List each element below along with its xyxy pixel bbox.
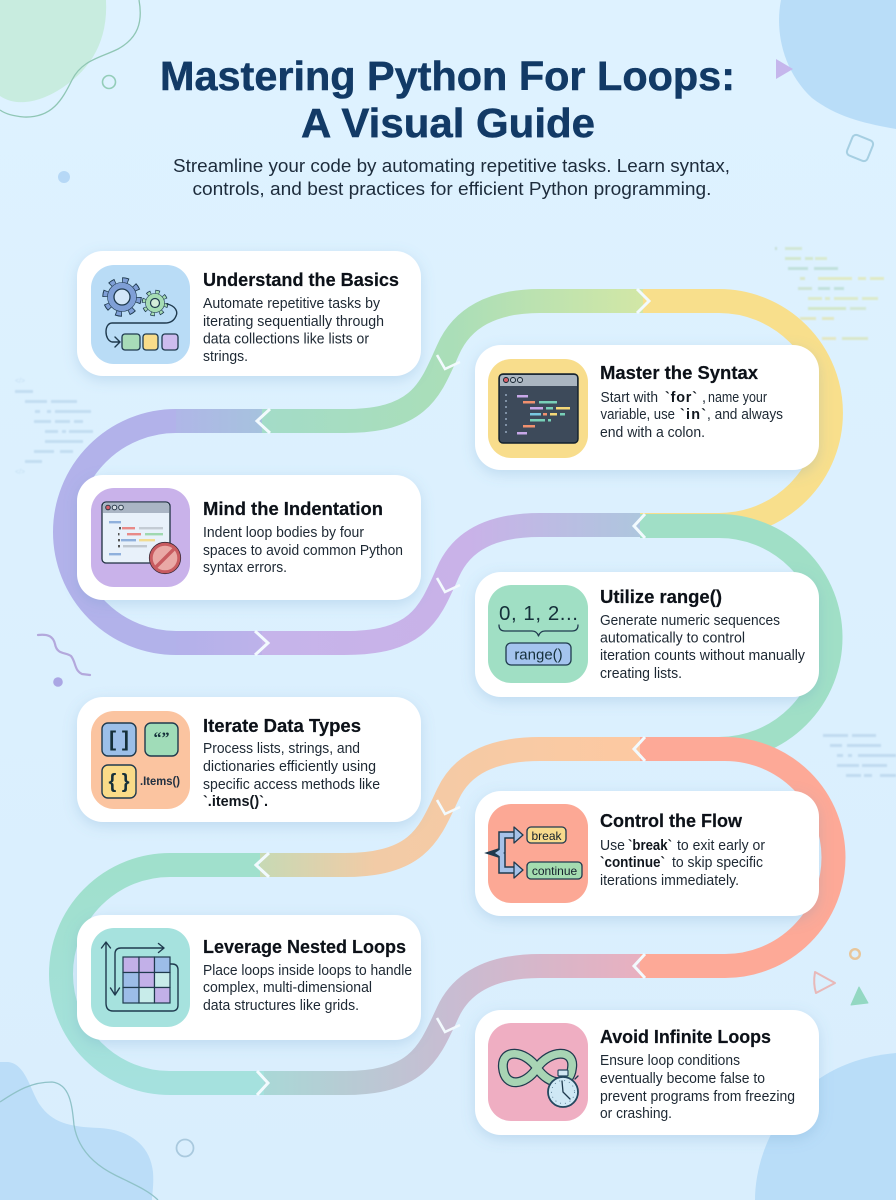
card body text: Generate numeric sequences [600,613,780,629]
card heading: Leverage Nested Loops [203,936,406,957]
card background [475,791,819,916]
decorative code lines: left [15,378,93,476]
decorative code lines: left: </> [15,469,25,476]
panel: Understand the Basics [77,251,421,376]
card body text: specific access methods like [203,777,380,793]
card body text: variable, use [600,407,675,423]
flow path: continuous loop of coloured bands [61,289,834,1095]
decorative ring: bottom [176,1140,194,1156]
decorative code lines: top right [775,247,884,340]
panel: Leverage Nested Loops [77,915,421,1040]
band: green S-curve [262,301,643,421]
card body text [600,838,765,889]
band: mauve S-curve [264,966,640,1083]
decorative blob: top right [779,0,896,129]
icon: data type symbols: .Items() [140,776,180,788]
card heading: Mind the Indentation [203,498,383,519]
card background [77,697,421,822]
decorative squiggle: left [38,635,90,675]
card body text: `break` [628,838,672,854]
icon: infinity loop with stopwatch [488,1023,588,1121]
card body text: to skip specific [672,855,763,871]
card body text: Place loops inside loops to handle [203,963,412,979]
subtitle: controls, and best practices for efficient Python programming. [192,178,712,199]
card background [475,345,819,470]
card body text: `for` [665,390,697,406]
card body text: data collections like lists or [203,332,369,348]
card heading: Utilize range() [600,586,722,607]
card body text: name your [708,390,767,406]
card body text: , [702,390,706,406]
card body text: strings. [203,349,248,365]
panel: Control the Flow [475,791,819,916]
band: salmon arc [640,749,834,966]
card body text [203,741,380,810]
band: purple lower straight [176,631,262,655]
decorative triangle: teal [851,987,868,1005]
card body text: spaces to avoid common Python [203,543,403,559]
decorative curve: top left [0,0,140,117]
card body text: `continue` [600,855,665,871]
chevron markers on the path [255,289,649,1095]
card body text: Automate repetitive tasks by [203,296,381,312]
card body text: `in` [680,407,706,423]
card body text: `.items()`. [203,794,268,810]
icon: gears and sequence [91,265,190,364]
title: Mastering Python For Loops: [160,53,735,99]
icon: data type symbols: “” [154,730,170,747]
card background [475,572,819,697]
icon: number sequence from range: range() [514,646,563,664]
card body text: creating lists. [600,666,682,682]
decorative blob: bottom right [755,1053,896,1200]
card body text: eventually become false to [600,1071,765,1087]
card body text: Ensure loop conditions [600,1053,740,1069]
icon: data type symbols: { } [108,771,130,793]
card body text: iterations immediately. [600,873,739,889]
title: A Visual Guide [301,100,595,146]
card body text: end with a colon. [600,425,705,441]
card body text: Use [600,838,625,854]
icon: branching arrows: break [531,829,563,843]
band: yellow arc [640,301,831,525]
subtitle: Streamline your code by automating repetitive tasks. Learn syntax, [173,155,730,176]
icon: code editor [488,359,588,458]
decorative triangle outline: pink [814,972,835,993]
decorative code lines: left: </> [15,378,25,385]
card background [475,1010,819,1135]
card body text: dictionaries efficiently using [203,759,376,775]
icon: indented code with stop sign [91,488,190,587]
card body text: to exit early or [677,838,765,854]
card body text: automatically to control [600,630,745,646]
card body text: Start with [600,390,658,406]
decorative rounded square: top right [846,134,874,162]
title [160,53,735,146]
panel: Avoid Infinite Loops [475,1010,819,1135]
card body text: Process lists, strings, and [203,741,360,757]
card body text [203,296,384,365]
band: purple upper curve [176,409,262,433]
card heading: Avoid Infinite Loops [600,1026,771,1047]
card heading: Understand the Basics [203,269,399,290]
card body text [600,613,806,682]
card body text: or crashing. [600,1106,672,1122]
decorative code lines: right [823,734,896,777]
decorative blob: top left [0,0,106,102]
card background [77,915,421,1040]
card body text: data structures like grids. [203,998,359,1014]
decorative ring: top left [102,76,116,88]
card heading: Control the Flow [600,810,743,831]
card body text [600,390,783,441]
card background [77,475,421,600]
band: purple S-curve [262,525,640,643]
decorative triangle: top right [776,59,793,79]
card body text: Indent loop bodies by four [203,525,364,541]
subtitle [173,155,730,199]
card heading: Iterate Data Types [203,715,361,736]
band: purple arc [65,421,176,643]
decorative ring: orange [850,949,860,959]
card body text: , and always [707,407,783,423]
decorative dot: left [58,171,70,183]
card body text: complex, multi-dimensional [203,980,372,996]
icon: data type symbols [91,711,190,809]
band: teal arc [61,865,264,1083]
panel: Mind the Indentation [77,475,421,600]
card heading: Master the Syntax [600,362,759,383]
decorative curve: bottom left [0,1082,158,1200]
panel: Master the Syntax [475,345,819,470]
icon: nested loops grid [91,928,190,1027]
icon: data type symbols: [ ] [109,728,129,751]
icon: number sequence from range [488,585,588,683]
card background [77,251,421,376]
card body text: iterating sequentially through [203,314,384,330]
card body text [600,1053,795,1122]
card body text [203,963,412,1014]
panel: Utilize range() [475,572,819,697]
card body text: syntax errors. [203,560,287,576]
card body text: iteration counts without manually [600,648,806,664]
icon: branching arrows [488,804,588,903]
decorative dot: left purple [53,677,63,687]
icon: branching arrows: continue [532,864,578,878]
band: orange S-curve [260,749,640,865]
band: mint arc [640,526,831,749]
panel: Iterate Data Types [77,697,421,822]
card body text: prevent programs from freezing [600,1089,795,1105]
decorative blob: bottom left [0,1062,153,1200]
card body text [203,525,403,576]
icon: number sequence from range: 0, 1, 2... [499,602,578,625]
